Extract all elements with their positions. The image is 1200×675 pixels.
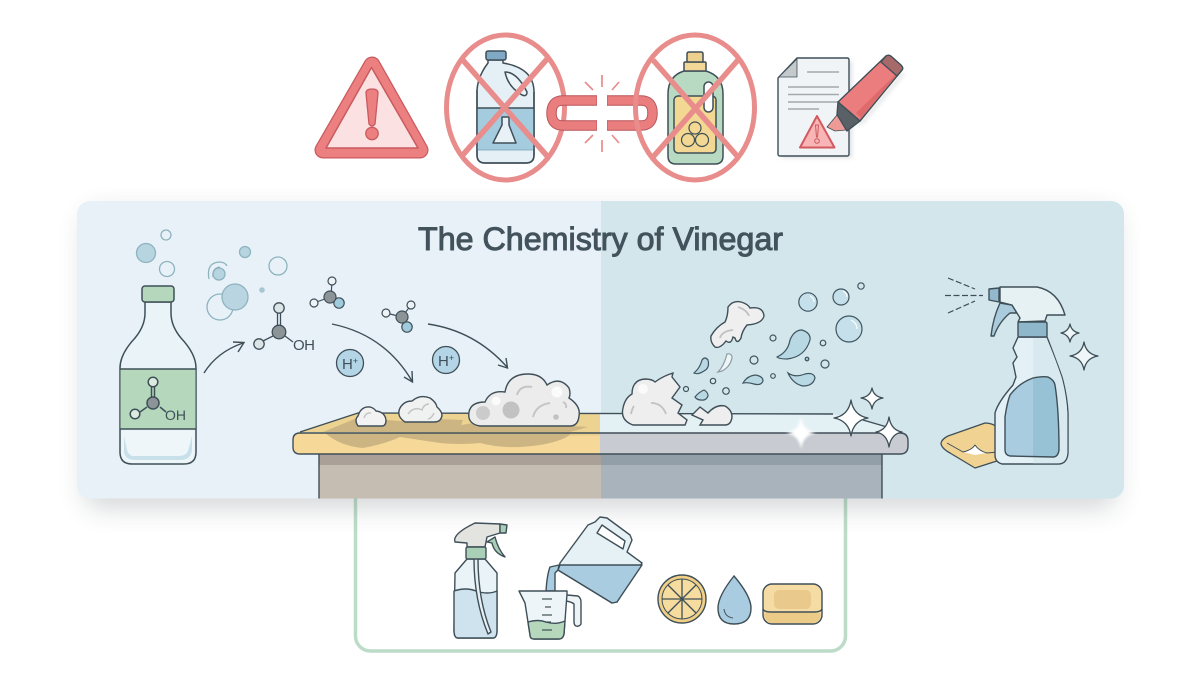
cup <box>519 591 581 639</box>
break sparks <box>585 75 619 152</box>
icon: broken chain link <box>552 75 652 152</box>
supply: measuring cup and pouring jug <box>519 517 642 639</box>
molecule: acetic acid: OH <box>293 337 315 354</box>
icon: document with highlighter <box>778 55 905 158</box>
icon: crossed-out biohazard bottle <box>636 35 754 180</box>
arrow: bottle to molecule <box>204 342 244 373</box>
spray mist <box>945 278 983 313</box>
droplets and bubbles <box>684 283 864 400</box>
panel: supplies box <box>356 480 846 651</box>
molecule: fragment one <box>310 277 344 308</box>
sparkles on counter <box>834 388 902 447</box>
foam: small <box>356 407 386 426</box>
molecule: fragment two <box>382 301 415 332</box>
counter top clean side <box>600 413 908 454</box>
sparkles near bottle <box>1061 324 1098 370</box>
counter <box>293 413 908 500</box>
glint on clean counter <box>786 417 816 449</box>
document <box>778 58 852 158</box>
foam: medium <box>399 397 442 422</box>
counter outlines <box>293 413 908 454</box>
vinegar bottle <box>120 286 196 464</box>
supply: water drop <box>718 576 751 624</box>
title: The Chemistry of Vinegar <box>418 221 783 257</box>
arrow: molecule to foam <box>332 324 412 382</box>
supply: lemon slice <box>658 575 706 623</box>
icon: crossed-out bleach bottle <box>446 35 564 180</box>
hydrogen ion one: H <box>342 356 353 373</box>
prohibition mark <box>446 35 564 180</box>
cleaning cloth <box>941 423 1000 468</box>
jug <box>558 517 642 603</box>
icon: warning triangle <box>323 65 420 150</box>
hydrogen ion two <box>432 346 460 374</box>
prohibition mark <box>636 35 754 180</box>
spray bottle <box>945 278 1068 464</box>
foam: large <box>469 374 579 426</box>
hydrogen ion two: H <box>438 353 449 370</box>
biohazard symbol <box>682 122 708 146</box>
panel: chemistry of vinegar <box>77 201 1124 499</box>
highlighter <box>827 55 905 131</box>
counter base <box>319 454 882 500</box>
hydrogen ion two: + <box>449 353 454 363</box>
molecule: acetic acid <box>254 303 315 354</box>
panel shadow <box>85 212 1116 508</box>
bleach jug <box>477 51 534 163</box>
arrow: ion to foam <box>428 324 508 368</box>
counter top stained side <box>293 413 601 454</box>
supply: soap bar <box>763 584 822 624</box>
pouring stream <box>546 565 559 591</box>
supply: empty spray bottle <box>454 523 507 638</box>
chemical bottle <box>668 52 723 164</box>
foam: breaking up <box>622 373 732 425</box>
foam: floating <box>711 302 764 347</box>
label molecule: OH <box>165 407 186 423</box>
rising bubbles <box>136 230 287 320</box>
hydrogen ion one <box>336 350 364 376</box>
hydrogen ion one: + <box>353 356 358 366</box>
label molecule <box>130 377 186 423</box>
